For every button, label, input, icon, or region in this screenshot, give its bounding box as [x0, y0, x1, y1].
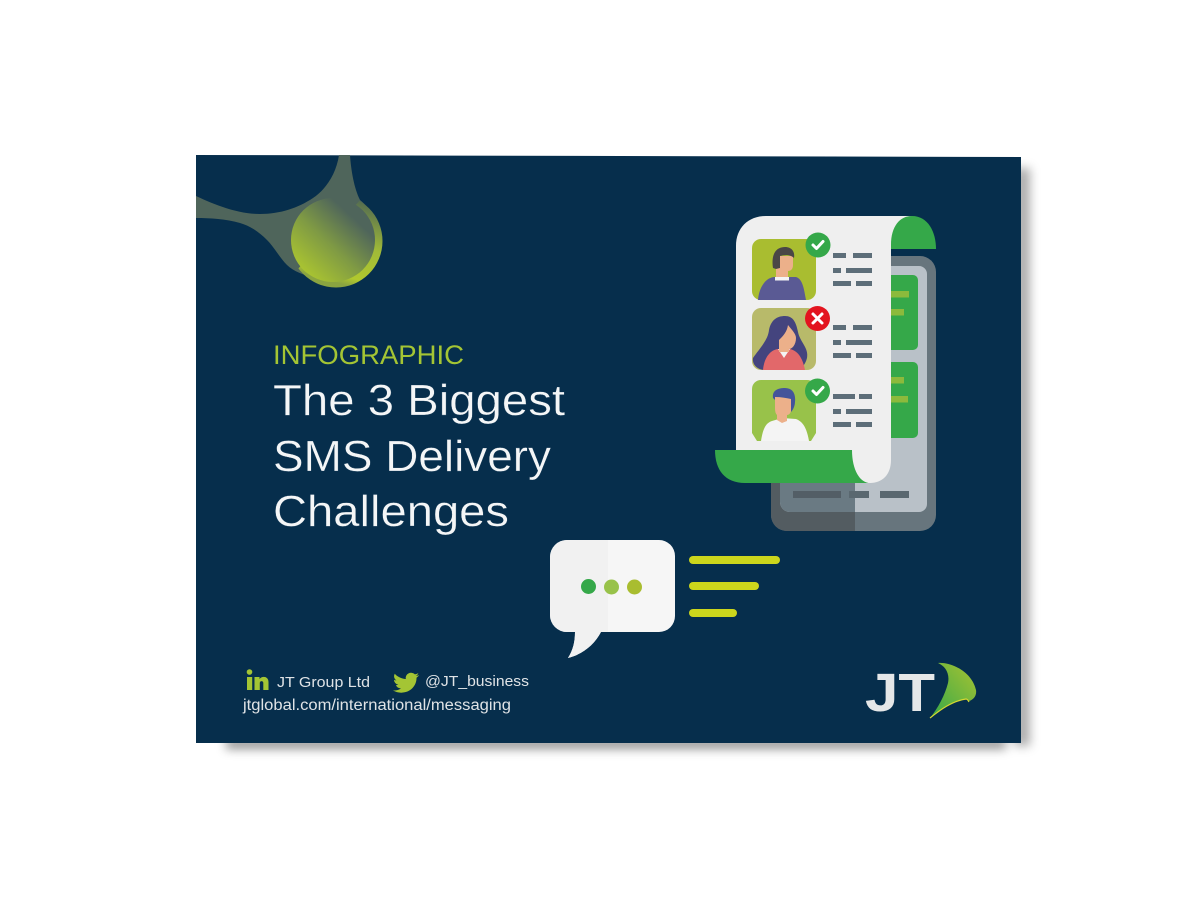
droplet graphic — [196, 155, 382, 288]
website link: jtglobal.com/international/messaging — [242, 697, 511, 714]
infographic brochure cover — [196, 155, 1036, 756]
status: check — [805, 378, 830, 404]
profile 3 — [752, 380, 816, 441]
social: twitter — [393, 673, 529, 693]
icon: linkedin — [247, 669, 268, 690]
profile 1 — [752, 239, 816, 300]
scroll paper — [736, 216, 912, 483]
logo sail — [930, 663, 976, 718]
icon: twitter bird — [393, 673, 419, 693]
phone body — [771, 256, 936, 531]
heading: Challenges — [273, 487, 509, 536]
profile 1 lines — [833, 253, 872, 286]
speech bubble — [550, 540, 675, 658]
droplet core — [291, 198, 375, 282]
scroll top curl — [891, 216, 936, 249]
status: cross — [805, 306, 830, 331]
heading — [273, 376, 565, 536]
text: eyebrow: INFOGRAPHIC — [273, 340, 464, 370]
panel: brochure page — [196, 155, 1021, 743]
social: twitter: @JT_business — [425, 673, 529, 690]
droplet crescent — [298, 201, 382, 288]
social: linkedin: JT Group Ltd — [277, 674, 370, 691]
profile 2 — [752, 308, 816, 370]
typing dots — [581, 579, 642, 594]
profile 3 lines — [833, 394, 872, 427]
illustration: phone with document — [715, 216, 936, 531]
page shadow — [226, 168, 1030, 749]
speed lines — [689, 556, 780, 617]
heading: The 3 Biggest — [273, 376, 565, 425]
JT logo — [865, 663, 976, 723]
phone message cards — [860, 275, 918, 438]
status: check — [806, 232, 830, 258]
JT logo: JT — [865, 663, 935, 723]
scroll bottom curl — [715, 450, 868, 483]
profile 2 lines — [833, 325, 872, 358]
social: linkedin — [247, 669, 370, 691]
heading: SMS Delivery — [273, 432, 551, 481]
